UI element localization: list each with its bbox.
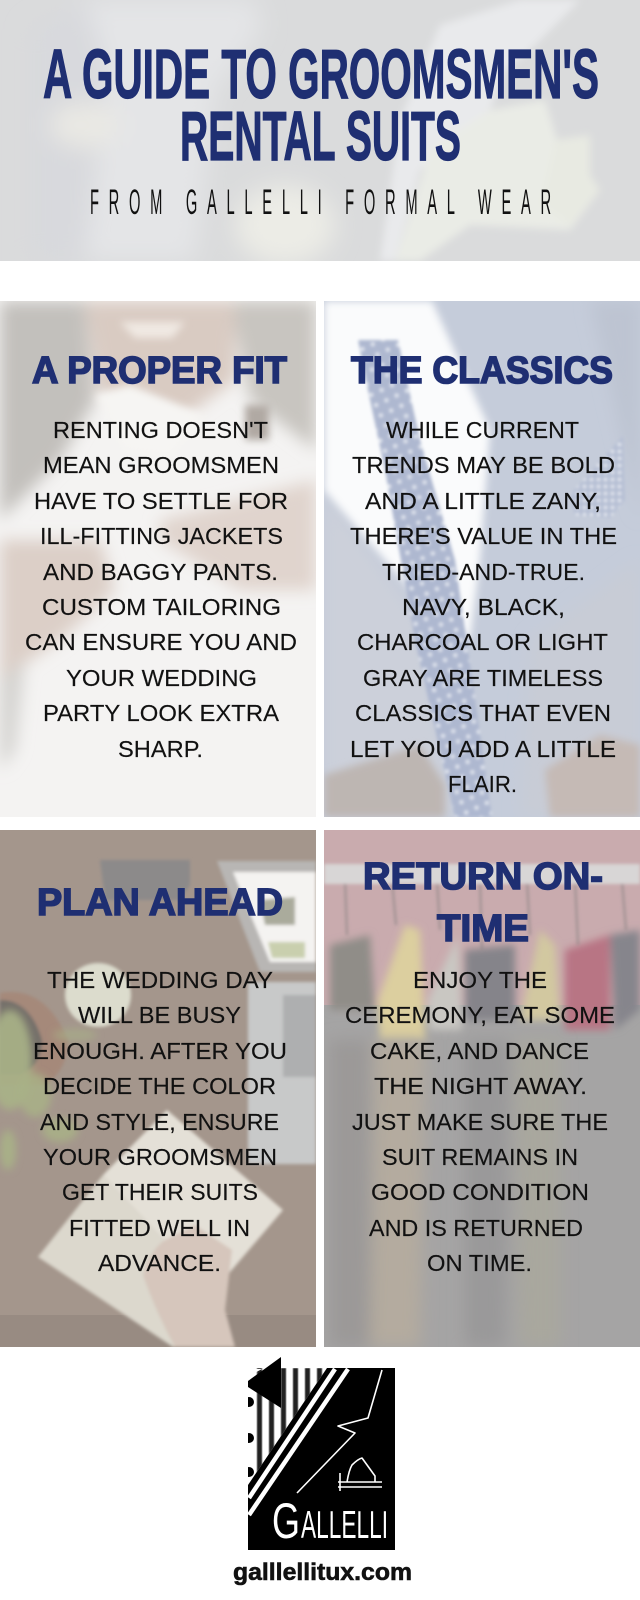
- body text: plan ahead: WILL BE BUSY: [78, 1002, 241, 1028]
- body text: a proper fit: CUSTOM TAILORING: [42, 594, 281, 620]
- body text: a proper fit: HAVE TO SETTLE FOR: [34, 488, 288, 514]
- body text: plan ahead: THE WEDDING DAY: [47, 967, 273, 993]
- body text: plan ahead: FITTED WELL IN: [69, 1215, 250, 1241]
- body text: a proper fit: RENTING DOESN'T: [53, 417, 268, 443]
- panel: a proper fit: [0, 301, 316, 817]
- body text: the classics: GRAY ARE TIMELESS: [363, 665, 603, 691]
- body text: a proper fit: AND BAGGY PANTS.: [43, 559, 278, 585]
- panel: the classics: [324, 301, 640, 817]
- heading: return on-time: [363, 856, 603, 950]
- logo wordmark: ALLELLI: [301, 1504, 388, 1547]
- body text: return on-time: SUIT REMAINS IN: [382, 1144, 578, 1170]
- body text: the classics: AND A LITTLE ZANY,: [365, 488, 601, 514]
- body text: the classics: WHILE CURRENT: [386, 417, 579, 443]
- body text: the classics: [350, 417, 617, 797]
- body text: return on-time: JUST MAKE SURE THE: [352, 1109, 608, 1135]
- heading: return on-time: RETURN ON-: [363, 856, 603, 898]
- body text: a proper fit: YOUR WEDDING: [66, 665, 257, 691]
- body text: the classics: NAVY, BLACK,: [402, 594, 565, 620]
- body text: a proper fit: PARTY LOOK EXTRA: [43, 700, 280, 726]
- body text: a proper fit: ILL-FITTING JACKETS: [40, 523, 283, 549]
- body text: return on-time: ENJOY THE: [413, 967, 547, 993]
- photo: man adjusting collar: [0, 301, 316, 817]
- body text: plan ahead: ENOUGH. AFTER YOU: [33, 1038, 287, 1064]
- body text: the classics: CLASSICS THAT EVEN: [355, 700, 611, 726]
- body text: the classics: CHARCOAL OR LIGHT: [357, 629, 608, 655]
- body text: the classics: TRENDS MAY BE BOLD: [352, 452, 615, 478]
- logo wordmark: [272, 1493, 388, 1549]
- body text: the classics: LET YOU ADD A LITTLE: [350, 736, 616, 762]
- body text: a proper fit: [25, 417, 297, 762]
- body text: return on-time: ON TIME.: [427, 1250, 532, 1276]
- body text: return on-time: AND IS RETURNED: [369, 1215, 583, 1241]
- body text: plan ahead: ADVANCE.: [98, 1250, 221, 1276]
- photo: desk with laptop and notebook: [0, 830, 316, 1347]
- body text: plan ahead: GET THEIR SUITS: [62, 1179, 258, 1205]
- body text: a proper fit: CAN ENSURE YOU AND: [25, 629, 297, 655]
- body text: plan ahead: YOUR GROOMSMEN: [43, 1144, 277, 1170]
- body text: return on-time: THE NIGHT AWAY.: [374, 1073, 587, 1099]
- heading: plan ahead: PLAN AHEAD: [37, 882, 283, 924]
- subtitle: FROM GALLELLI FORMAL WEAR: [90, 183, 551, 222]
- logo: Gallelli: [244, 1357, 395, 1550]
- panel: return on-time: [324, 830, 640, 1347]
- panel: plan ahead: [0, 830, 316, 1347]
- heading: return on-time: TIME: [437, 908, 529, 950]
- heading: the classics: THE CLASSICS: [351, 350, 613, 392]
- heading: a proper fit: A PROPER FIT: [32, 350, 287, 392]
- header panel: [0, 0, 640, 265]
- photo: navy suit and dotted tie: [324, 301, 640, 817]
- photo: jackets on a clothes rail: [324, 830, 640, 1347]
- body text: plan ahead: [33, 967, 287, 1276]
- website url: galllellitux.com: [233, 1559, 412, 1586]
- body text: plan ahead: AND STYLE, ENSURE: [40, 1109, 279, 1135]
- body text: the classics: THERE'S VALUE IN THE: [350, 523, 617, 549]
- body text: the classics: FLAIR.: [448, 771, 517, 797]
- body text: return on-time: CAKE, AND DANCE: [370, 1038, 589, 1064]
- body text: return on-time: GOOD CONDITION: [371, 1179, 589, 1205]
- logo wordmark: G: [272, 1493, 300, 1549]
- header photo background: [0, 0, 640, 265]
- body text: a proper fit: SHARP.: [118, 736, 203, 762]
- body text: return on-time: [345, 967, 615, 1276]
- clothes rail: [324, 864, 640, 884]
- body text: the classics: TRIED-AND-TRUE.: [382, 559, 585, 585]
- body text: return on-time: CEREMONY, EAT SOME: [345, 1002, 615, 1028]
- body text: a proper fit: MEAN GROOMSMEN: [43, 452, 279, 478]
- body text: plan ahead: DECIDE THE COLOR: [43, 1073, 276, 1099]
- title: [43, 35, 599, 175]
